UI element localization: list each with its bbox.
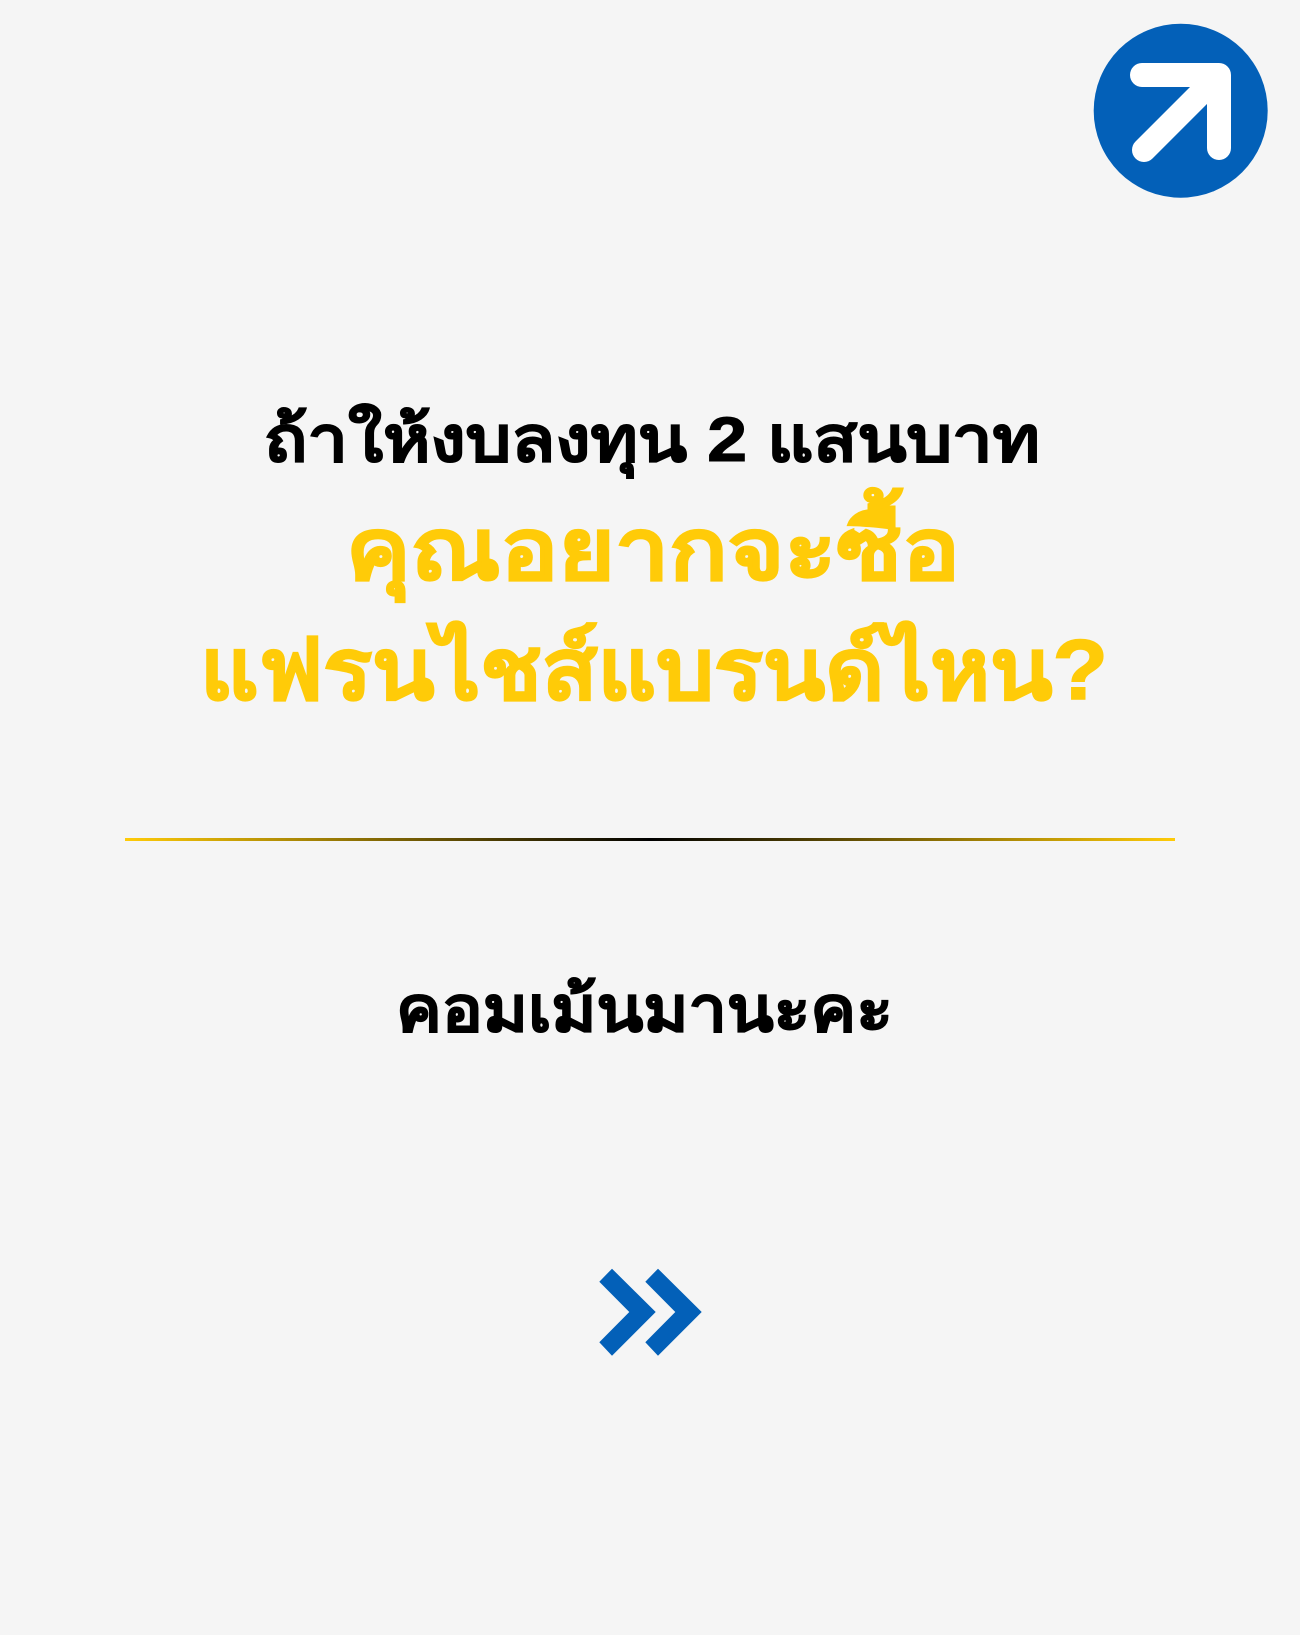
- icon: blue circle with up-right arrow: [1094, 24, 1268, 198]
- icon: double chevron right: [599, 1269, 702, 1356]
- heading line 3: แฟรนไชส์แบรนด์ไหน?: [200, 621, 1108, 718]
- divider rule: [125, 838, 1175, 841]
- call to action text: คอมเม้นมานะคะ: [396, 975, 893, 1045]
- heading line 1: ถ้าให้งบลงทุน 2 แสนบาท: [264, 403, 1040, 479]
- heading line 2: คุณอยากจะซื้อ: [346, 487, 960, 603]
